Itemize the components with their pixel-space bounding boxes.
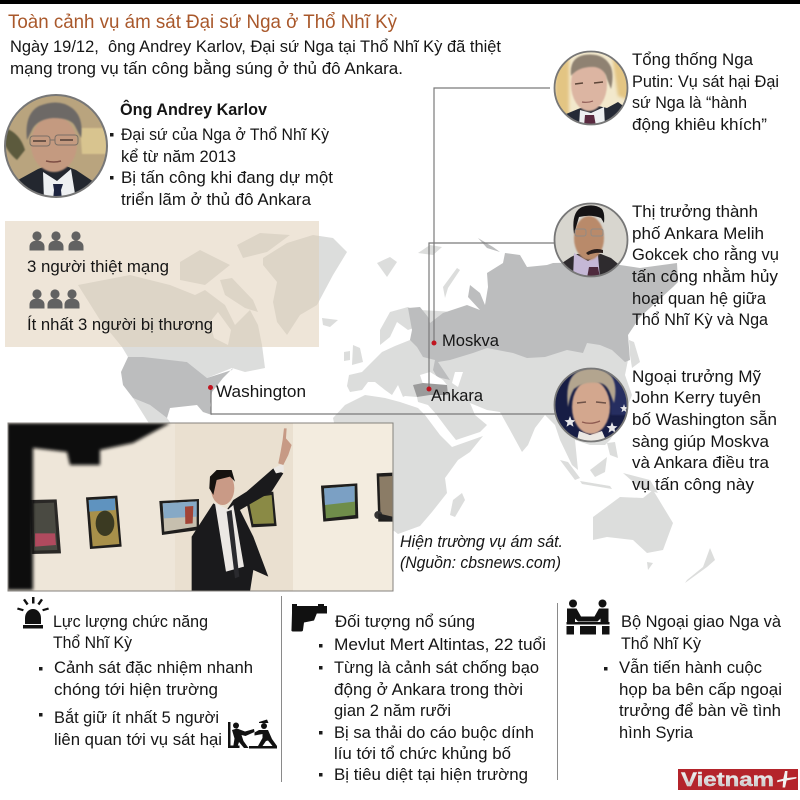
microphone — [374, 511, 392, 522]
photo: assassination scene — [7, 423, 393, 592]
map: Eurasia — [347, 310, 632, 470]
connector: Gokcek to Ankara — [429, 243, 554, 389]
panel: gunman: Từng là cảnh sát chống bạo — [334, 659, 539, 677]
map: New Guinea — [623, 473, 658, 493]
map: Baffin Island — [220, 278, 258, 312]
paintings — [30, 473, 392, 554]
panel: foreign ministries: hình Syria — [619, 724, 694, 742]
map: Hudson Bay — [210, 312, 231, 345]
panel: Turkish forces: Lực lượng chức năng — [53, 613, 208, 631]
panel: foreign ministries: trưởng để bàn về tình — [619, 702, 781, 720]
gunman — [192, 428, 292, 592]
panel: foreign ministries: Bộ Ngoại giao Nga và — [621, 613, 782, 631]
Karlov details: triển lãm ở thủ đô Ankara — [121, 191, 312, 209]
world map — [78, 233, 715, 583]
panel: gunman — [291, 604, 546, 784]
portrait: Putin — [550, 50, 632, 126]
map: Canada and Alaska — [78, 275, 265, 378]
map: Mexico — [133, 398, 172, 425]
map: Novaya Zemlya — [443, 268, 460, 298]
quote: Putin: sứ Nga là “hành — [632, 94, 747, 112]
top black bar — [0, 0, 800, 4]
title: Toàn cảnh vụ ám sát Đại sứ Nga ở Thổ Nhĩ Kỳ — [8, 11, 397, 33]
panel: Turkish forces — [17, 597, 277, 749]
map: Australia — [593, 490, 673, 553]
intro text — [10, 38, 501, 78]
quote: Gokcek: Thổ Nhĩ Kỳ và Nga — [632, 311, 769, 329]
panel: gunman: động ở Ankara trong thời — [334, 681, 523, 699]
panel: foreign ministries: Vẫn tiến hành cuộc — [619, 658, 762, 677]
icon: three people killed — [30, 231, 84, 250]
quote: Putin: động khiêu khích” — [632, 116, 767, 134]
photo caption — [400, 533, 563, 572]
connector: Kerry to Washington — [211, 388, 555, 414]
panel: Turkish forces: Thổ Nhĩ Kỳ — [53, 634, 133, 652]
map: Ireland — [344, 351, 350, 361]
photo caption: (Nguồn: cbsnews.com) — [400, 554, 561, 572]
map: Java — [580, 481, 612, 489]
Karlov details: Đại sứ của Nga ở Thổ Nhĩ Kỳ — [121, 126, 330, 144]
panel: Turkish forces: Bắt giữ ít nhất 5 người — [54, 708, 219, 727]
quote: Putin: Tổng thống Nga — [632, 51, 754, 69]
map: Tasmania — [647, 562, 653, 570]
panel: gunman: Bị sa thải do cáo buộc dính — [334, 724, 534, 742]
map: Caspian Sea — [452, 372, 463, 387]
panel: casualties — [5, 221, 319, 347]
text: killed: 3 người thiệt mạng — [27, 258, 169, 276]
quote: Putin — [632, 51, 779, 134]
portrait: Andrey Karlov — [4, 94, 108, 198]
quote: Kerry: John Kerry tuyên — [632, 389, 761, 407]
text: wounded: Ít nhất 3 người bị thương — [27, 315, 213, 334]
quote: Kerry: Ngoại trưởng Mỹ — [632, 368, 762, 386]
panel: Turkish forces: liên quan tới vụ sát hại — [54, 731, 222, 749]
quote: Gokcek — [632, 203, 779, 329]
map: Madagascar — [450, 493, 465, 517]
icon: three people wounded — [30, 289, 80, 308]
quote: Gokcek: hoại quan hệ giữa — [632, 290, 767, 308]
map: Japan — [629, 340, 640, 368]
map: New Zealand — [685, 548, 715, 583]
panel: foreign ministries: Thổ Nhĩ Kỳ — [621, 635, 702, 653]
panel: Turkish forces: chóng tới hiện trường — [54, 681, 218, 699]
icon: siren — [17, 597, 49, 628]
quote: Kerry: vụ tấn công này — [632, 476, 755, 494]
intro text: Ngày 19/12, ông Andrey Karlov, Đại sứ Nga tại Thổ Nhĩ Kỳ đã thiệt — [10, 38, 501, 56]
panel: gunman: líu tới tổ chức khủng bố — [334, 745, 511, 763]
Karlov details: kể từ năm 2013 — [121, 148, 236, 166]
map: Turkey — [413, 383, 448, 397]
divider — [281, 596, 282, 782]
map: Britain — [352, 345, 363, 365]
panel: foreign ministries — [566, 600, 782, 742]
map: Severnaya Zemlya — [478, 238, 500, 252]
portrait: John Kerry — [554, 368, 628, 442]
map: Svalbard — [377, 257, 397, 277]
intro text: mạng trong vụ tấn công bằng súng ở thủ đô Ankara. — [10, 59, 403, 78]
quote: Gokcek: phố Ankara Melih — [632, 225, 764, 243]
map: Africa — [333, 395, 483, 534]
icon: meeting — [566, 600, 610, 634]
map: United States — [121, 357, 233, 418]
Karlov details: Bị tấn công khi đang dự một — [121, 169, 333, 187]
quote: Kerry: và Ankara điều tra — [632, 454, 770, 472]
map: Sumatra — [560, 460, 580, 480]
quote: Gokcek: Thị trưởng thành — [632, 203, 758, 221]
map: Philippines — [607, 442, 618, 458]
map: Ellesmere Island — [237, 233, 290, 258]
connector: Putin to Moskva — [434, 88, 550, 343]
quote: Kerry: bố Washington sẵn — [632, 410, 777, 429]
map: Russia — [408, 253, 678, 380]
quote: Gokcek: Gokcek cho rằng vụ — [632, 245, 779, 264]
panel: foreign ministries: họp ba bên cấp ngoại — [619, 681, 782, 699]
map: Scandinavia — [380, 307, 422, 345]
map: Franz Josef Land — [418, 245, 442, 255]
icon: arrest — [228, 720, 277, 748]
map: Victoria Island — [180, 250, 230, 285]
panel: gunman: Mevlut Mert Altintas, 22 tuổi — [334, 636, 546, 654]
portrait: Melih Gokcek — [554, 202, 628, 278]
panel: gunman: Bị tiêu diệt tại hiện trường — [334, 766, 528, 784]
panel: gunman: Đối tượng nổ súng — [335, 613, 475, 631]
icon: pistol — [291, 604, 327, 632]
blurred foreground camera — [7, 423, 170, 590]
divider — [557, 603, 558, 780]
map: Iceland — [322, 318, 338, 327]
Karlov details: Ông Andrey Karlov — [120, 100, 267, 119]
map: Greenland — [263, 235, 347, 335]
logo: Vietnam+ — [678, 769, 798, 791]
photo caption: Hiện trường vụ ám sát. — [400, 533, 563, 551]
marker: Ankara: Ankara — [431, 387, 484, 405]
map: Borneo — [590, 457, 607, 477]
quote: Gokcek: tấn công nhằm hủy — [632, 267, 779, 286]
Karlov details — [110, 100, 333, 209]
panel: Turkish forces: Cảnh sát đặc nhiệm nhanh — [54, 659, 253, 677]
marker: Washington: Washington — [216, 383, 306, 401]
map: Black Sea — [420, 372, 447, 385]
quote: Kerry — [632, 368, 777, 494]
logo: Vietnam+: Vietnam — [681, 770, 774, 791]
panel: gunman: gian 2 năm rưỡi — [334, 702, 451, 720]
marker: Moskva: Moskva — [442, 332, 500, 350]
quote: Kerry: sàng giúp Moskva — [632, 433, 770, 451]
quote: Putin: Putin: Vụ sát hại Đại — [632, 73, 779, 91]
